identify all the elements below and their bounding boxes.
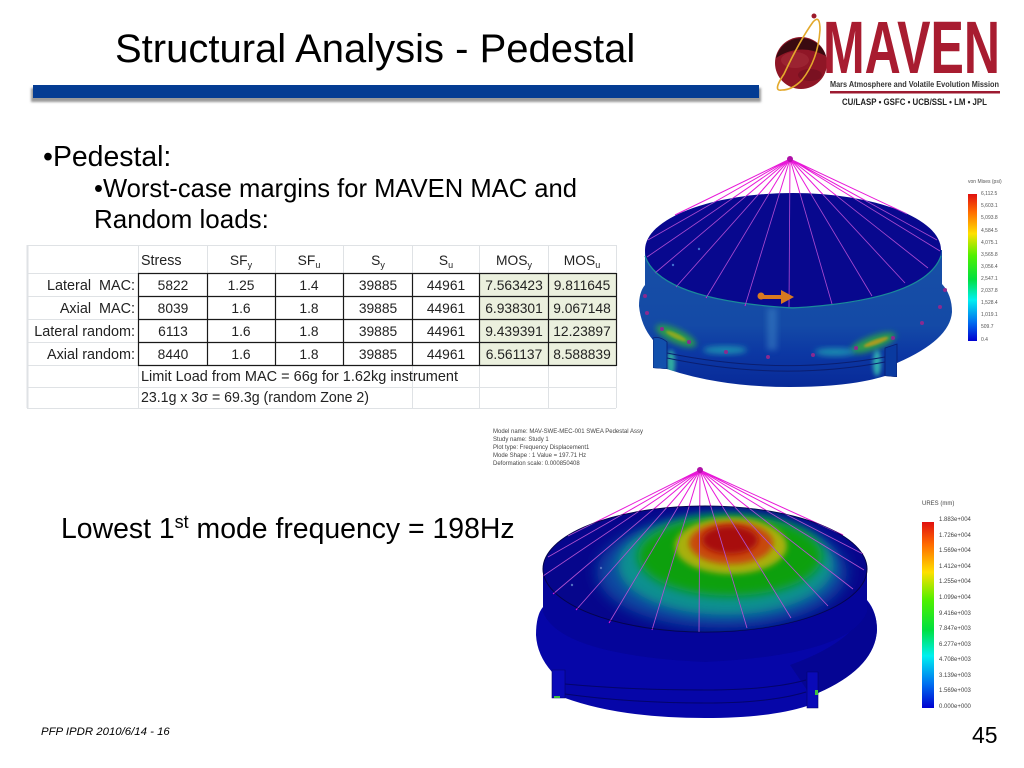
table header: SF [298, 253, 315, 268]
legend: URES: URES (mm) [922, 501, 954, 507]
legend: von Mises: von Mises (psi) [968, 179, 1002, 185]
table row: axial random: 44961 [427, 347, 465, 362]
legend: URES: 1.412e+004 [939, 564, 972, 570]
legend: von Mises: 4,075.1 [981, 240, 998, 246]
table row: axial MAC: 1.6 [231, 301, 251, 316]
page number: 45 [972, 722, 998, 748]
table row: lateral random: 1.6 [231, 324, 251, 339]
sub bullet: worst-case margins [94, 173, 577, 234]
table row: lateral random: 6113 [158, 324, 188, 339]
table header: u [315, 260, 320, 270]
table row: axial random [47, 347, 611, 363]
table row: lateral random: 39885 [359, 324, 398, 339]
icon: orange force arrow [758, 290, 794, 304]
callout: lowest mode frequency: Lowest 1 [61, 513, 175, 545]
table header: MOS [564, 253, 595, 268]
icon: apex node [697, 467, 703, 473]
table note: random zone: 23.1g x 3σ = 69.3g (random Zone 2) [141, 390, 369, 406]
surface specks [672, 248, 700, 266]
logo: MAVEN [775, 6, 1000, 107]
table header: y [527, 260, 532, 270]
legend: von Mises: 5,603.1 [981, 203, 998, 209]
legend: URES: 9.416e+003 [939, 611, 972, 617]
table row: lateral random [34, 324, 611, 340]
table row: lateral random: 12.23897 [553, 324, 611, 339]
table row: axial random: 1.6 [231, 347, 251, 362]
sub bullet: worst-case margins: Random loads: [94, 204, 269, 234]
model information text [493, 429, 643, 467]
legend: URES: 4.708e+003 [939, 657, 972, 663]
wires over top face [544, 506, 864, 632]
table row: axial MAC: 1.8 [299, 301, 319, 316]
callout: lowest mode frequency: st [175, 512, 189, 532]
table header: Stress [141, 253, 182, 269]
table row: lateral MAC: 1.25 [228, 278, 255, 293]
top face with displacement heat map [543, 506, 867, 632]
legend: URES: 1.726e+004 [939, 533, 972, 539]
wires: rigid connectors [647, 159, 940, 307]
table header: u [595, 260, 600, 270]
legend: von Mises: 5,093.8 [981, 215, 998, 221]
table header: SF [230, 253, 248, 268]
bolts [643, 288, 947, 359]
table row: axial MAC: 9.067148 [553, 301, 611, 316]
table header: MOS [496, 253, 527, 268]
legend: von Mises: 1,528.4 [981, 300, 998, 306]
surface specks [571, 567, 602, 586]
legend: URES [922, 501, 972, 710]
legend: URES: 0.000e+000 [939, 704, 972, 710]
table row: lateral random: 9.439391 [485, 324, 543, 339]
legend: URES: 3.139e+003 [939, 673, 972, 679]
table row: lateral random: 1.8 [299, 324, 319, 339]
table row: axial MAC: 8039 [158, 301, 189, 316]
table row: axial MAC: Axial MAC: [60, 301, 135, 317]
header bar [31, 85, 761, 102]
model information text: Deformation scale: 0.000850408 [493, 461, 580, 467]
footer: PFP IPDR 2010/6/14 - 16 [41, 726, 170, 738]
table row: lateral MAC: 9.811645 [554, 278, 611, 293]
table row: lateral random: Lateral random: [34, 324, 135, 340]
rim highlight [645, 256, 941, 308]
legend: URES: 1.569e+004 [939, 548, 972, 554]
feet [552, 670, 818, 708]
body and flange [639, 250, 952, 387]
base flange [536, 600, 877, 718]
model information text: Plot type: Frequency Displacement1 [493, 445, 590, 451]
table row: axial MAC: 6.938301 [485, 301, 543, 316]
legend: URES: 1.883e+004 [939, 517, 972, 523]
table row: axial MAC [60, 301, 611, 317]
table row: lateral MAC: 7.563423 [485, 278, 543, 293]
legend: URES: 1.255e+004 [939, 579, 972, 585]
table row: axial random: 39885 [359, 347, 398, 362]
model information text: Model name: MAV-SWE-MEC-001 SWEA Pedestal Assy [493, 429, 643, 435]
sub bullet: worst-case margins: •Worst-case margins for MAVEN MAC and [94, 173, 577, 203]
model: frequency displacement [536, 467, 877, 718]
legend: URES: 1.099e+004 [939, 595, 972, 601]
table row: axial MAC: 39885 [359, 301, 398, 316]
icon: apex node [787, 156, 793, 162]
wires over top face [646, 193, 940, 307]
legend: von Mises: 509.7 [981, 324, 994, 330]
table row: axial random: 1.8 [299, 347, 319, 362]
top face [645, 193, 941, 307]
legend: URES: 7.847e+003 [939, 626, 972, 632]
table header: y [248, 260, 253, 270]
legend: von Mises: 3,565.8 [981, 252, 998, 258]
legend: URES: 6.277e+003 [939, 642, 972, 648]
table note: limit load: Limit Load from MAC = 66g for 1.62kg instrument [141, 369, 458, 385]
table header: S [371, 253, 380, 268]
table row: axial random: Axial random: [47, 347, 135, 363]
legend: von Mises [968, 179, 1002, 343]
legend: URES: 1.569e+003 [939, 688, 972, 694]
table row: lateral MAC: 39885 [359, 278, 398, 293]
foot highlights [554, 690, 818, 698]
legend: von Mises: 2,037.8 [981, 288, 998, 294]
table row: lateral MAC [47, 278, 611, 294]
partners: CU/LASP • GSFC • UCB/SSL • LM • JPL [842, 97, 987, 107]
legend: von Mises: 3,056.4 [981, 264, 998, 270]
legend: von Mises: 4,584.5 [981, 228, 998, 234]
legend: von Mises: 0.4 [981, 337, 988, 343]
model information text: Study name: Study 1 [493, 437, 549, 443]
table row: lateral random: 44961 [427, 324, 465, 339]
bullet: Pedestal: •Pedestal: [43, 141, 171, 173]
legend: von Mises: 6,112.5 [981, 191, 998, 197]
cylinder wall [543, 569, 867, 662]
wires: rigid connectors [543, 470, 864, 632]
model: von Mises stress [639, 156, 952, 387]
table: margins [26, 245, 616, 408]
table header: y [380, 260, 385, 270]
table header: u [448, 260, 453, 270]
flange shading [790, 602, 877, 693]
table row: lateral MAC: 5822 [158, 278, 188, 293]
table row: lateral MAC: 1.4 [299, 278, 319, 293]
callout: lowest mode frequency: mode frequency = 198Hz [189, 513, 515, 545]
table header [141, 253, 600, 270]
table row: lateral MAC: Lateral MAC: [47, 278, 135, 294]
table header: S [439, 253, 448, 268]
table row: axial MAC: 44961 [427, 301, 465, 316]
legend: von Mises: 1,019.1 [981, 312, 998, 318]
legend: von Mises: 2,547.1 [981, 276, 998, 282]
table row: axial random: 8.588839 [553, 347, 611, 362]
table row: axial random: 6.561137 [486, 347, 542, 362]
model information text: Mode Shape : 1 Value = 197.71 Hz [493, 453, 586, 459]
mission name: Mars Atmosphere and Volatile Evolution Mission [830, 79, 999, 89]
table row: axial random: 8440 [158, 347, 189, 362]
table row: lateral MAC: 44961 [427, 278, 465, 293]
icon: Mars sphere [775, 14, 827, 90]
title: Structural Analysis - Pedestal [115, 27, 635, 71]
